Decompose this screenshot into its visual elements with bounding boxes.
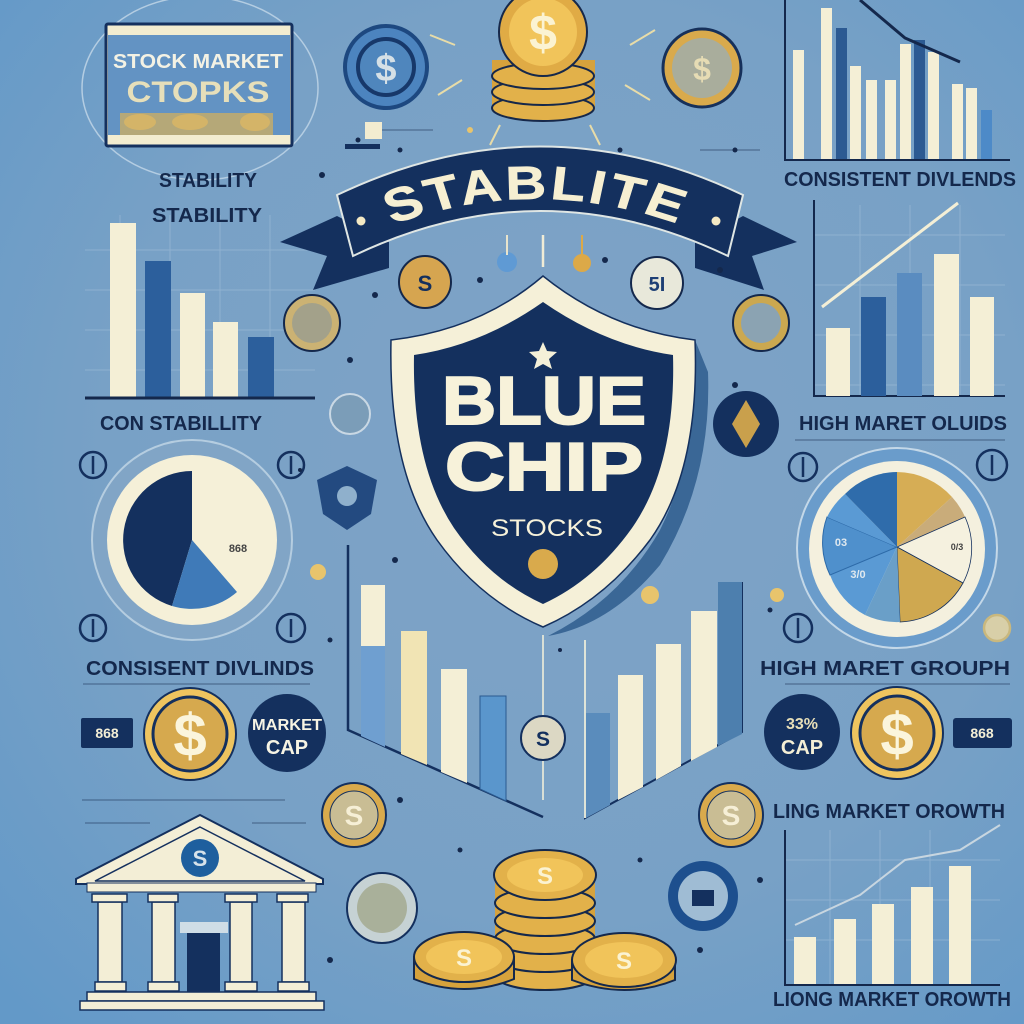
banner text: STABLITE <box>384 166 688 223</box>
pie chart: right: 3/0 <box>850 569 866 581</box>
chart: top right bars <box>785 0 1010 160</box>
label: stability 2: STABILITY <box>152 205 263 227</box>
label: con stability: CON STABILLITY <box>100 413 263 435</box>
right small tag and coin row <box>764 687 1012 779</box>
icon: bank building: S <box>193 846 207 871</box>
small outlined icons around pies <box>80 450 1010 642</box>
chart: center V right <box>585 582 742 818</box>
chart: center V left <box>348 545 543 817</box>
right small tag and coin row: 33% <box>786 716 818 733</box>
icon: bank building <box>76 815 324 1010</box>
shield: blue chip stocks: CHIP <box>445 429 643 505</box>
small coin icons around shield <box>284 256 789 530</box>
label: consistent dividends top: CONSISTENT DIVLENDS <box>784 169 1016 191</box>
icon: gold seal coin: $ <box>693 51 711 87</box>
icon: center small coin: S <box>536 728 550 751</box>
label: high market group: HIGH MARET GROUPH <box>760 658 1010 680</box>
left small tag and coin row: $ <box>173 702 207 769</box>
banner: ribbon <box>280 146 797 290</box>
icon: gold seal coin <box>663 29 741 107</box>
icon: bottom coin stack: S <box>616 948 632 975</box>
icon: mid coins <box>322 783 763 943</box>
icon: navy dollar coin <box>345 26 427 108</box>
chart: bottom right bars <box>785 825 1000 985</box>
label: long market growth bottom: LIONG MARKET OROWTH <box>773 989 1011 1011</box>
shield title: BLUE <box>442 363 646 439</box>
icon: bottom coin stack: S <box>456 945 472 972</box>
left small tag and coin row: MARKET <box>252 717 322 734</box>
right small tag and coin row: CAP <box>781 737 823 759</box>
icon: center small coin <box>521 635 565 800</box>
left small tag and coin row <box>81 688 326 780</box>
icon: cream square with dash <box>345 122 382 149</box>
pie chart: right: 03 <box>835 537 847 549</box>
shield: blue chip stocks: STOCKS <box>491 515 603 542</box>
label: long market growth top: LING MARKET OROWTH <box>773 801 1005 823</box>
icon: top coin stack <box>492 0 595 121</box>
chart: right bars <box>814 200 1005 396</box>
pie chart: right: 0/3 <box>951 542 963 552</box>
label: high market oluids: HIGH MARET OLUIDS <box>799 413 1007 435</box>
icon: top coin stack: $ <box>529 5 557 61</box>
left small tag and coin row: 868 <box>95 725 119 741</box>
label: consistent dividends left: CONSISENT DIVLINDS <box>86 658 314 680</box>
icon: mid coins: S <box>722 800 740 831</box>
icon: navy dollar coin: $ <box>375 48 397 90</box>
panel: stock market poster <box>82 0 318 180</box>
right small tag and coin row: 868 <box>970 725 994 741</box>
left small tag and coin row: CAP <box>266 737 308 759</box>
icon: mid coins: S <box>345 800 363 831</box>
panel: stock market poster: CTOPKS <box>126 76 270 109</box>
shield: blue chip stocks <box>391 276 708 636</box>
right small tag and coin row: $ <box>880 701 914 768</box>
label: stability 1: STABILITY <box>159 170 258 192</box>
icon: bottom coin stack <box>414 850 676 990</box>
poster title: STOCK MARKET <box>113 51 283 73</box>
icon: bottom coin stack: S <box>537 863 553 890</box>
chart: left bars <box>85 223 315 398</box>
pie chart: left <box>92 440 292 640</box>
small coin icons around shield: 5I <box>649 274 665 296</box>
pie chart: left: 868 <box>229 543 247 555</box>
icon: hanging drops under banner <box>497 235 591 272</box>
pie chart: right <box>797 448 997 648</box>
small coin icons around shield: S <box>418 271 432 296</box>
